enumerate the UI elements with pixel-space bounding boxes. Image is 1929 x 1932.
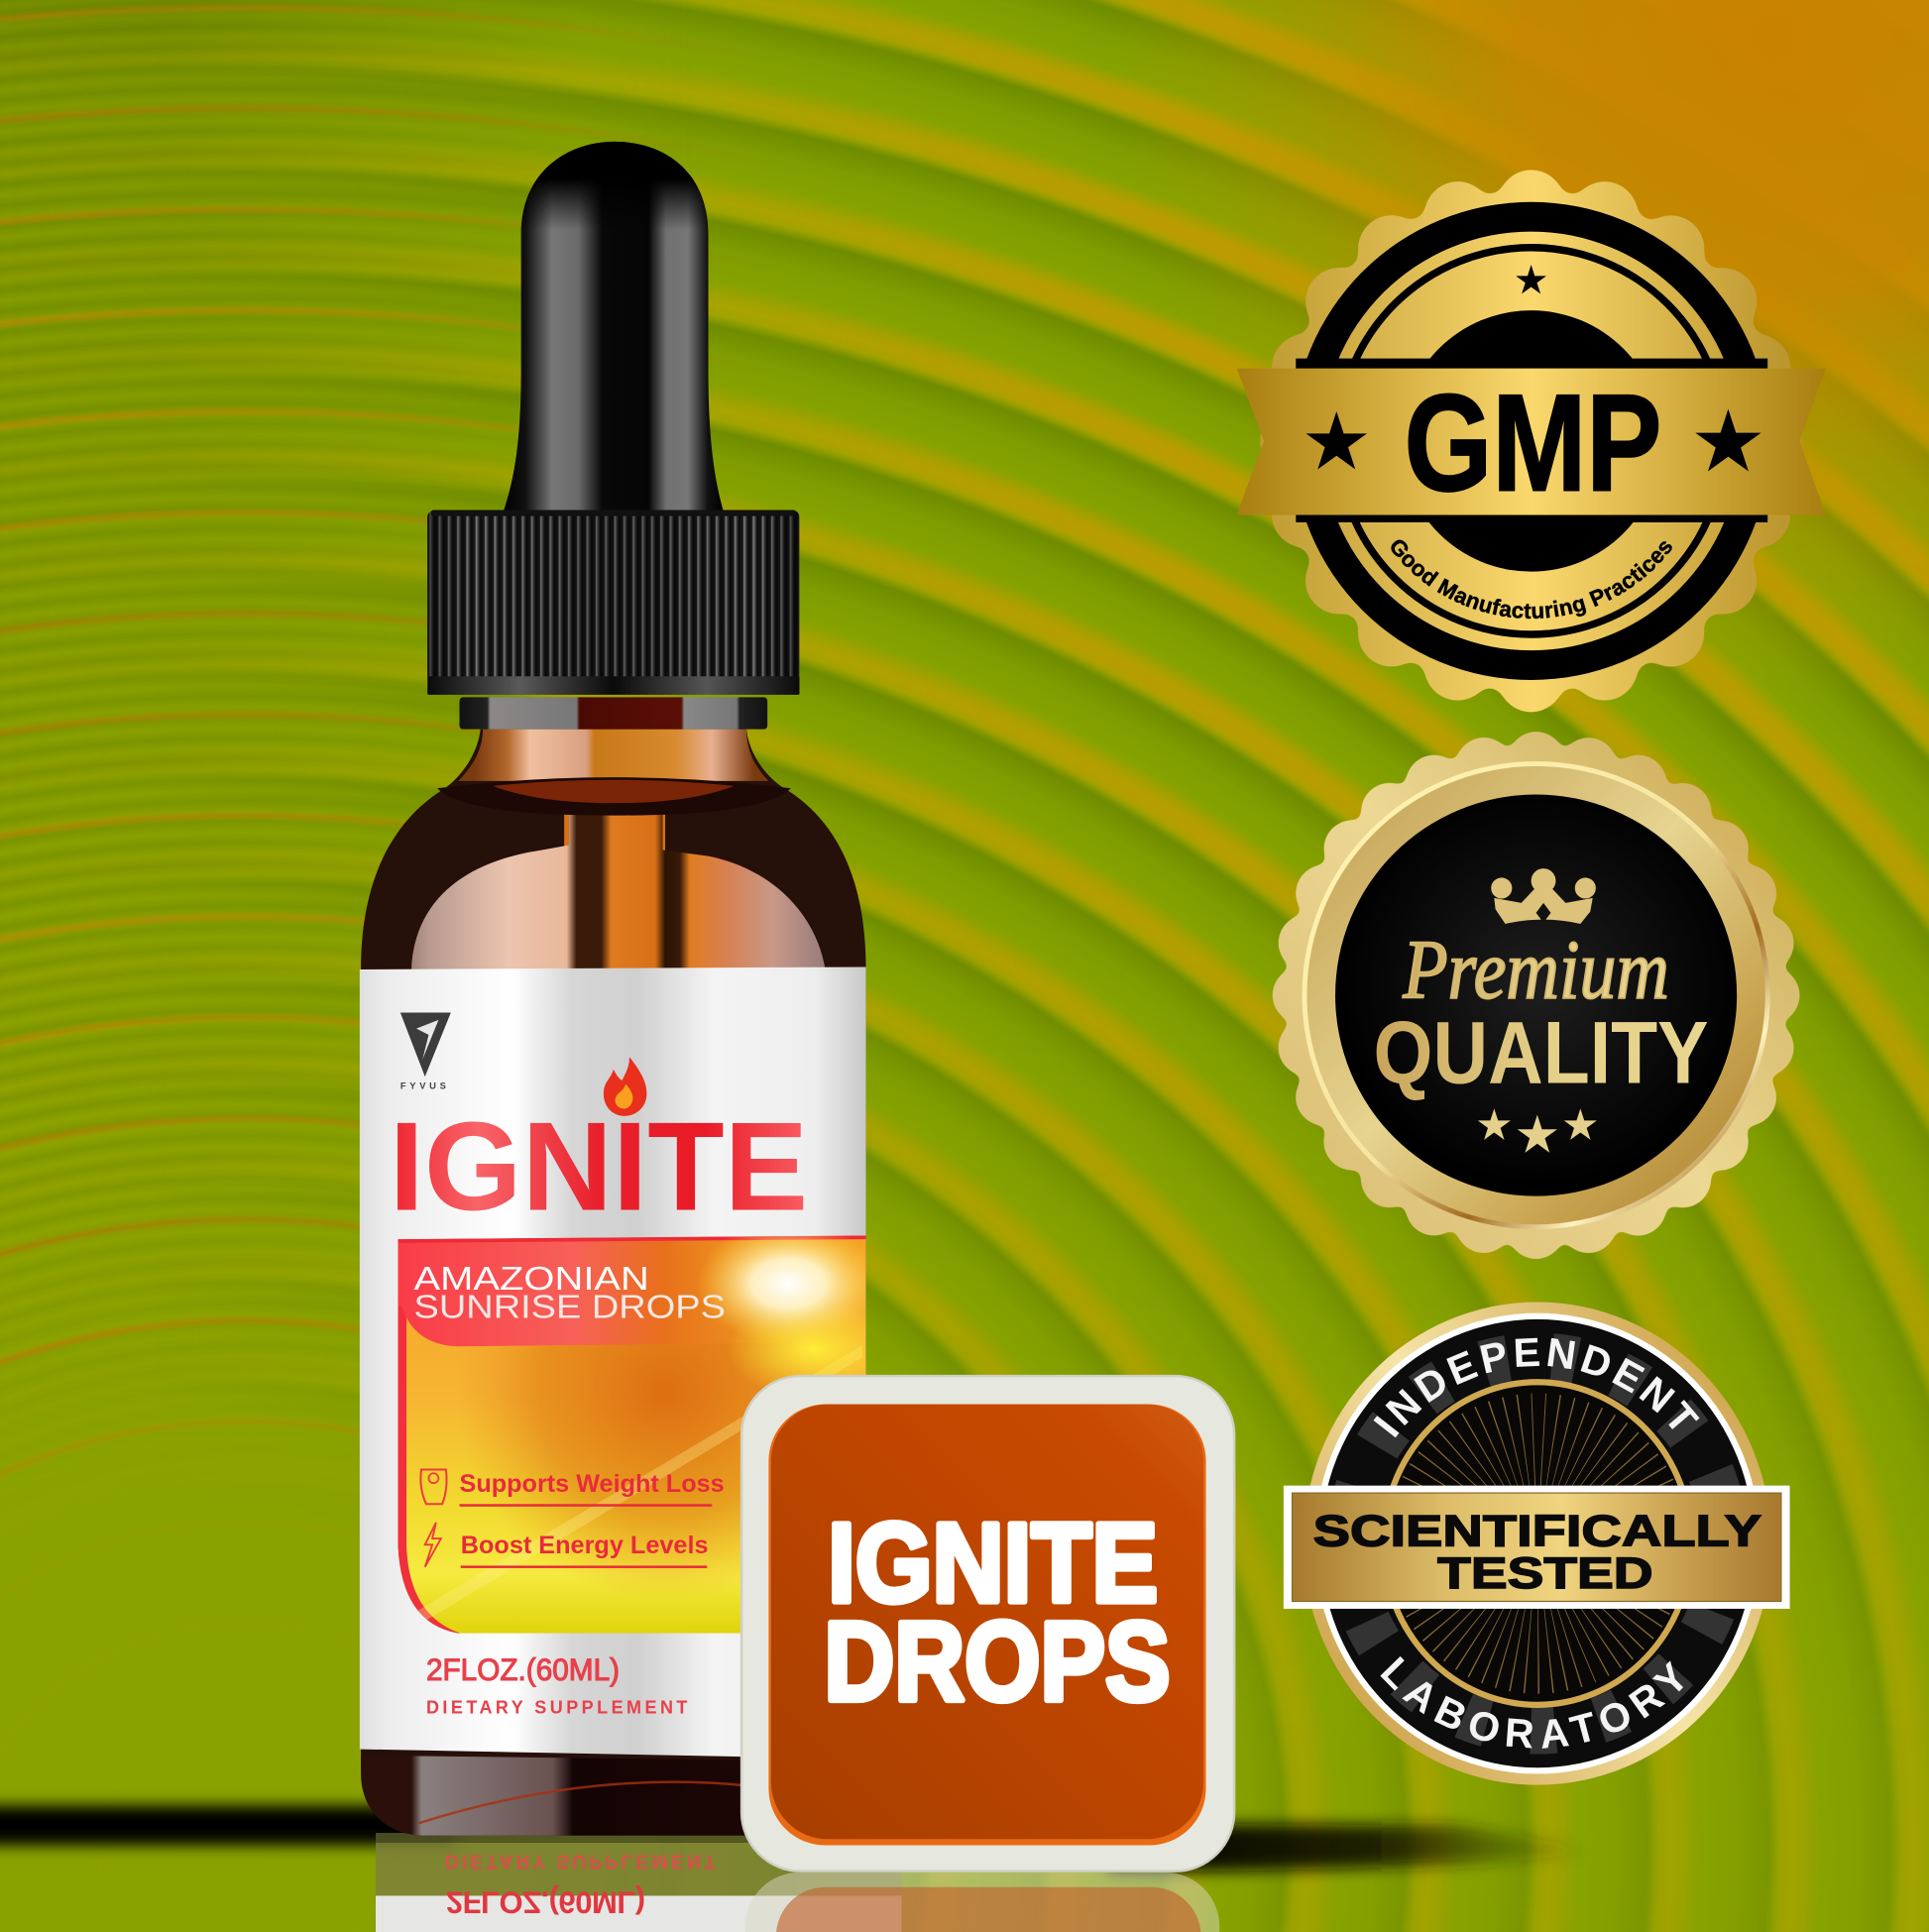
- bottle glass body: [361, 730, 866, 1836]
- benefit: energy: [425, 1523, 709, 1568]
- laboratory arc text: LABORATORY: [1380, 1655, 1683, 1749]
- crown: [1491, 868, 1596, 924]
- benefit: weight loss: [420, 1469, 725, 1507]
- black rings: [1293, 202, 1770, 680]
- box reflection: [745, 1873, 1219, 1932]
- white label: [360, 966, 866, 1760]
- product name: IGNITE: [390, 1095, 808, 1236]
- premium text: Premium: [1403, 925, 1669, 1017]
- box label: DROPS: [824, 1599, 1171, 1724]
- top star: [1516, 265, 1546, 293]
- inner dome: [1401, 310, 1661, 572]
- ignite drops box: [741, 1376, 1234, 1872]
- box label: [824, 1500, 1171, 1724]
- scalloped seal: [1281, 191, 1781, 691]
- tested: TESTED: [1437, 1549, 1653, 1598]
- reflected text: volume: 2FLOZ.(60ML): [446, 1885, 645, 1920]
- badge: scientifically tested: [1283, 1303, 1790, 1785]
- black disc: [1335, 795, 1737, 1196]
- scientifically: SCIENTIFICALLY: [1313, 1508, 1761, 1556]
- box label: IGNITE: [828, 1500, 1158, 1625]
- volume: 2FLOZ.(60ML): [426, 1652, 620, 1687]
- brand logo: FYVUS: [400, 1081, 450, 1091]
- subtitle: [414, 1261, 726, 1326]
- collar: [460, 697, 767, 730]
- badge: premium quality: [1293, 751, 1780, 1239]
- scalloped seal: [1293, 751, 1780, 1239]
- subtitle: AMAZONIAN: [414, 1261, 649, 1298]
- neck liquid line: [437, 777, 791, 816]
- sunburst rays: [1448, 1455, 1626, 1633]
- box frame: [741, 1376, 1234, 1872]
- reflected text: dietary supplement: DIETARY SUPPLEMENT: [445, 1850, 716, 1872]
- black bars: [1296, 359, 1767, 370]
- ring segments: [1350, 1356, 1725, 1731]
- independent arc text: INDEPENDENT: [1374, 1338, 1699, 1437]
- flame icon: [604, 1057, 646, 1116]
- dietary supplement: DIETARY SUPPLEMENT: [426, 1698, 687, 1718]
- benefit: energy: Boost Energy Levels: [461, 1533, 709, 1559]
- brand logo: [400, 1012, 451, 1091]
- neck: [458, 730, 768, 781]
- black ring: [1320, 1319, 1755, 1767]
- ribbon: [1237, 369, 1826, 514]
- bottle: [360, 142, 899, 1836]
- GMP text: GMP: [1405, 367, 1661, 520]
- bottle reflection: [376, 1833, 902, 1932]
- gold inner ring: [1384, 1382, 1691, 1705]
- ribbon: [1284, 1486, 1790, 1609]
- ground shadow left: [0, 1806, 456, 1846]
- gold ring: [1302, 761, 1770, 1229]
- ribbon stars: [1306, 411, 1367, 470]
- dropper bulb: [504, 142, 723, 510]
- ribbed cap: [427, 510, 799, 695]
- gold outer ring: [1304, 1302, 1771, 1785]
- three stars: [1478, 1108, 1597, 1153]
- badge: GMP: [1237, 170, 1826, 712]
- arc text: Good Manufacturing Practices: [1391, 539, 1672, 619]
- subtitle: SUNRISE DROPS: [414, 1290, 726, 1326]
- ground shadow right: [1108, 1823, 1601, 1873]
- box face: [768, 1405, 1206, 1846]
- lower glass highlight: [361, 1756, 866, 1836]
- shoulder amber glass and highlights: [411, 813, 826, 969]
- central amber tube: [564, 801, 665, 973]
- gradient panel: [397, 1222, 899, 1634]
- benefit: weight loss: Supports Weight Loss: [460, 1471, 725, 1498]
- quality text: QUALITY: [1374, 1002, 1709, 1101]
